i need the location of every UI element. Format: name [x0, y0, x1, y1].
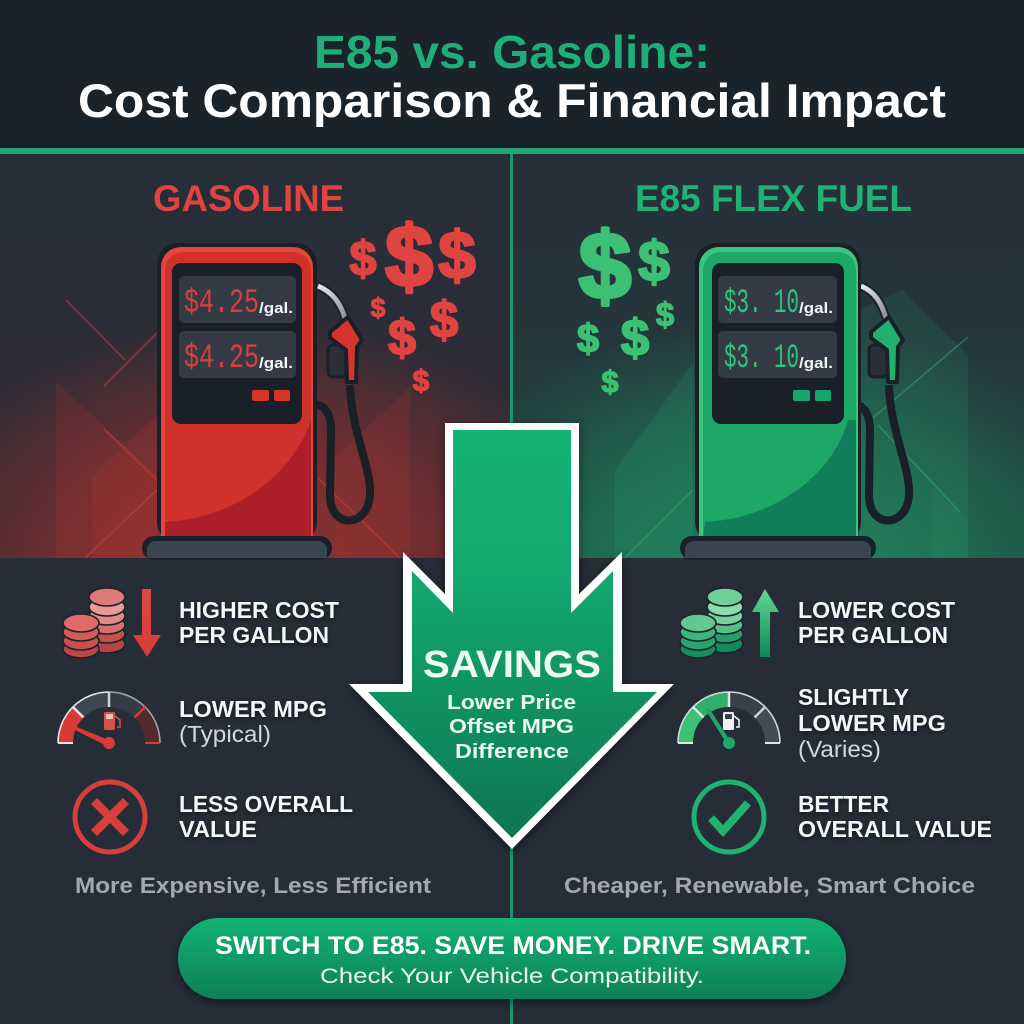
text: lower mpg: (Typical) [179, 721, 271, 747]
icon: green dollar signs: $ [579, 213, 631, 318]
icon: red cross [75, 782, 145, 852]
icon: green check [694, 782, 764, 852]
icon: red dollar signs: $ [350, 233, 377, 286]
text: better overall value: OVERALL VALUE [798, 816, 992, 842]
icon: red dollar signs: $ [430, 291, 458, 348]
icon: green gauge [678, 692, 780, 749]
text: better overall value [798, 791, 992, 842]
icon: gasoline pump: /gal. [259, 300, 293, 317]
title: E85 vs. Gasoline: [314, 26, 710, 78]
icon: green dollar signs: $ [601, 364, 619, 399]
icon: gasoline pump: /gal. [259, 355, 293, 372]
title: Cost Comparison & Financial Impact [78, 74, 946, 127]
icon: E85 pump: $3. 10 [724, 340, 799, 378]
icon: red coins [63, 588, 125, 658]
text: higher cost [179, 597, 339, 648]
text: lower cost [798, 597, 955, 648]
icon: green dollar signs [577, 213, 674, 399]
center divider [510, 154, 513, 1024]
icon: gasoline pump [142, 243, 370, 560]
text: less overall value: VALUE [179, 816, 257, 842]
icon: red down arrow [133, 589, 161, 657]
icon: red dollar signs [350, 209, 476, 398]
arrow: savings: Lower Price [447, 692, 576, 714]
text: less overall value: LESS OVERALL [179, 791, 353, 817]
header rule [0, 148, 1024, 154]
caption: gasoline summary: More Expensive, Less Efficient [75, 873, 432, 898]
text: lower mpg: LOWER MPG [179, 696, 327, 722]
header band [0, 0, 1024, 149]
icon: gasoline pump: $4.25 [184, 340, 259, 378]
icon: green dollar signs: $ [656, 296, 674, 333]
call to action pill: Check Your Vehicle Compatibility. [320, 965, 704, 988]
arrow: savings: SAVINGS [423, 644, 601, 686]
arrow: savings [349, 423, 674, 849]
icon: red dollar signs: $ [438, 218, 476, 293]
icon: red dollar signs: $ [385, 209, 433, 305]
arrow: savings: Offset MPG [449, 716, 574, 738]
text: slightly lower mpg: SLIGHTLY [798, 684, 909, 710]
call to action pill [178, 918, 846, 999]
text: higher cost: HIGHER COST [179, 597, 339, 623]
icon: green dollar signs: $ [638, 230, 670, 294]
icon: E85 pump: /gal. [799, 300, 833, 317]
icon: green up arrow [752, 589, 779, 657]
text: slightly lower mpg: (Varies) [798, 736, 881, 762]
text: better overall value: BETTER [798, 791, 889, 817]
text: lower mpg [179, 696, 327, 747]
heading: E85 flex fuel: E85 FLEX FUEL [635, 178, 912, 219]
icon: E85 pump: $3. 10 [724, 285, 799, 323]
heading: gasoline: GASOLINE [153, 178, 344, 219]
icon: red dollar signs: $ [370, 293, 386, 323]
icon: green dollar signs: $ [577, 317, 599, 361]
text: less overall value [179, 791, 353, 842]
text: lower cost: PER GALLON [798, 622, 948, 648]
icon: gasoline pump: $4.25 [184, 285, 259, 323]
arrow: savings: Difference [455, 741, 569, 763]
panel: gasoline background [0, 154, 510, 558]
icon: red dollar signs: $ [388, 310, 416, 366]
text: slightly lower mpg [798, 684, 946, 762]
icon: red gauge [58, 692, 160, 749]
text: slightly lower mpg: LOWER MPG [798, 710, 946, 736]
call to action pill: SWITCH TO E85. SAVE MONEY. DRIVE SMART. [215, 932, 811, 960]
title [78, 26, 946, 127]
icon: green coins [680, 588, 743, 658]
icon: E85 pump [680, 243, 909, 560]
caption: E85 summary: Cheaper, Renewable, Smart Choice [564, 873, 975, 898]
icon: green dollar signs: $ [621, 309, 649, 366]
text: higher cost: PER GALLON [179, 622, 329, 648]
icon: red dollar signs: $ [413, 365, 430, 398]
panel: E85 background [513, 154, 1024, 558]
icon: E85 pump: /gal. [799, 355, 833, 372]
text: lower cost: LOWER COST [798, 597, 955, 623]
